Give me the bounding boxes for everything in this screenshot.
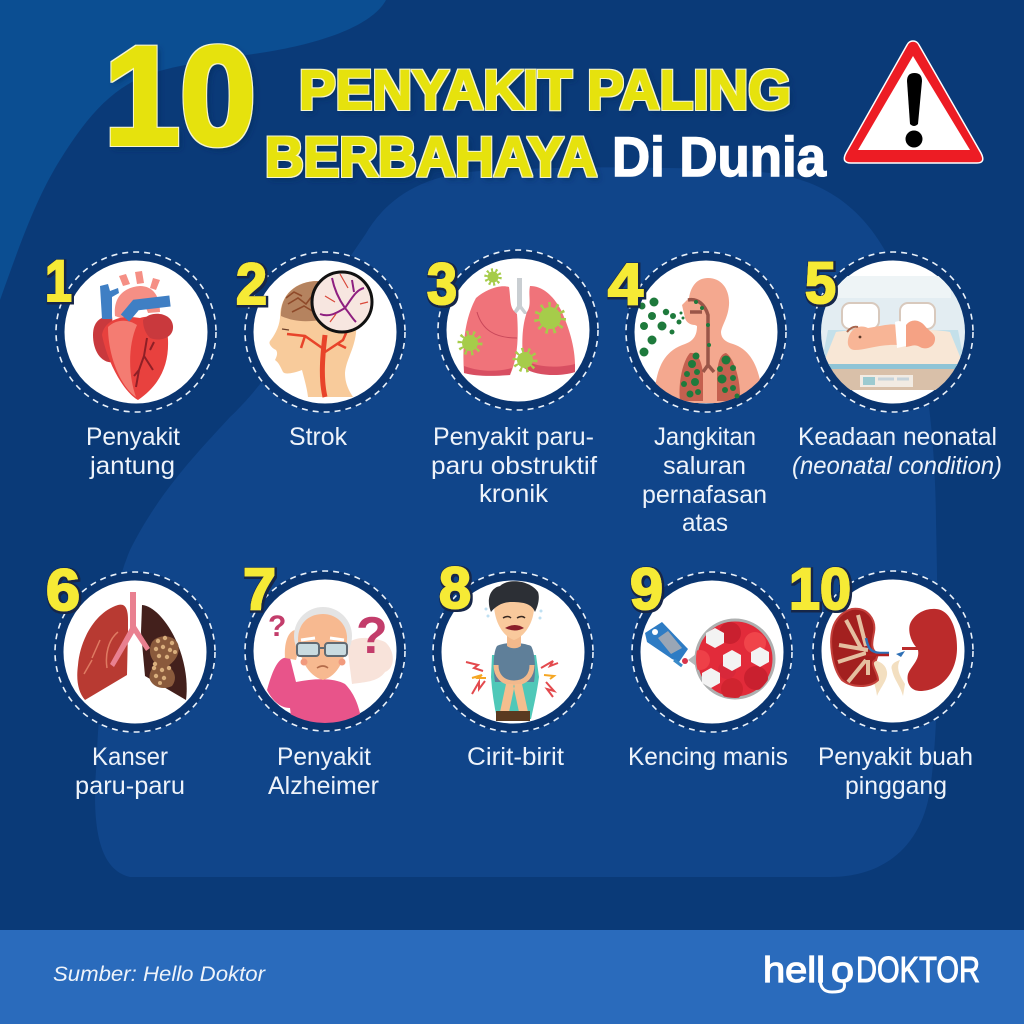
item 8: diarrhea [433, 556, 593, 771]
label 4: pernafasan [642, 481, 767, 509]
icon: elderly woman [267, 607, 393, 724]
label 2: Strok [289, 423, 347, 451]
label 1 [86, 423, 180, 480]
label 5: Keadaan neonatal [798, 423, 997, 451]
icon: respiratory tract [638, 278, 763, 403]
label 5: (neonatal condition) [792, 452, 1002, 480]
number 4: 4 [608, 252, 643, 317]
number 3: 3 [427, 252, 457, 317]
item 6: lung cancer [46, 558, 215, 800]
label 4: Jangkitan [654, 423, 756, 451]
label 5 [792, 423, 1002, 480]
number 10: 10 [789, 557, 851, 622]
title: line 2: BERBAHAYA [265, 125, 597, 188]
icon: heart [93, 271, 173, 400]
item 5: neonatal [792, 251, 1002, 480]
label 7: Penyakit [277, 743, 371, 771]
label 8: Cirit-birit [467, 743, 564, 771]
footer bar [0, 930, 1024, 1024]
item 1: heart [45, 249, 216, 480]
icon: cancerous lungs [77, 592, 187, 700]
label 9: Kencing manis [628, 743, 788, 771]
item 4: respiratory infection [608, 252, 786, 537]
label 4: atas [682, 509, 728, 537]
source credit: Sumber: Hello Doktor [53, 963, 266, 986]
icon: lungs with viruses [460, 270, 575, 376]
number 5: 5 [805, 251, 836, 316]
label 7: Alzheimer [268, 772, 379, 800]
icon: head with arteries [269, 272, 372, 397]
number 2: 2 [236, 252, 267, 317]
item 9: diabetes [628, 557, 792, 771]
title: line 1: PENYAKIT PALING [299, 58, 791, 121]
icon: elderly woman: ? [268, 610, 286, 643]
number 9: 9 [630, 557, 663, 622]
label 6: paru-paru [75, 772, 185, 800]
logo: helloDOKTOR [763, 949, 980, 992]
label 1: Penyakit [86, 423, 180, 451]
label 4 [642, 423, 767, 537]
icon: glucose meter and blood [645, 620, 774, 700]
label 6 [75, 743, 185, 800]
logo: helloDOKTOR: o [831, 949, 854, 990]
icon: warning triangle [844, 41, 983, 163]
label 10: Penyakit buah [818, 743, 973, 771]
icon: man on toilet [466, 581, 558, 721]
icon: kidneys [831, 609, 957, 696]
label 3: Penyakit paru- [433, 423, 594, 451]
label 1: jantung [89, 452, 175, 480]
title: Di Dunia: Di Dunia [612, 125, 827, 188]
label 3 [431, 423, 597, 508]
title: 10: 10 [104, 17, 256, 174]
virus [460, 270, 563, 370]
label 4: saluran [663, 452, 746, 480]
label 7 [268, 743, 379, 800]
icon: elderly woman: ? [356, 607, 388, 665]
item 3: COPD [427, 250, 598, 508]
label 10 [818, 743, 973, 800]
label 3: kronik [479, 480, 549, 508]
icon: incubator [821, 276, 965, 390]
label 10: pinggang [845, 772, 947, 800]
item 2: stroke [236, 252, 405, 451]
logo: helloDOKTOR: hell [763, 949, 825, 990]
logo: helloDOKTOR: DOKTOR [856, 949, 980, 990]
number 8: 8 [439, 556, 471, 621]
label 3: paru obstruktif [431, 452, 597, 480]
item 7: Alzheimer [243, 557, 405, 800]
number 6: 6 [46, 558, 80, 623]
item 10: kidney disease [789, 557, 973, 800]
number 7: 7 [243, 557, 276, 622]
label 6: Kanser [92, 743, 168, 771]
number 1: 1 [45, 249, 72, 314]
